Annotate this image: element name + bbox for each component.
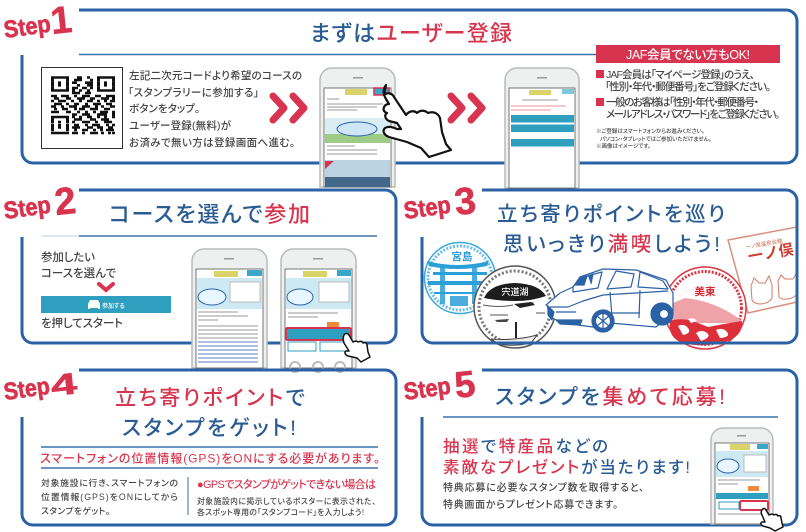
step 4 heading: スタンプをゲット! — [122, 417, 296, 440]
fine print: ※ご登録はスマートフォンからお進みください。 — [596, 127, 704, 135]
step 1 heading: まずはユーザー登録 — [310, 21, 512, 46]
stamp: Mito — [664, 267, 746, 349]
step 3 heading: 立ち寄りポイントを巡り — [497, 203, 725, 226]
stamp: Miyajima: 宮島 — [452, 250, 473, 263]
step 3 badge: Step — [402, 192, 452, 225]
step 5 badge: Step — [402, 373, 452, 406]
registration notes: 一般のお客様は「性別・年代・郵便番号・ — [606, 96, 759, 108]
panel: step 5 — [402, 363, 797, 531]
instructions: コースを選んで — [41, 267, 116, 280]
stamp: Miyajima — [424, 242, 496, 314]
QR code — [42, 68, 122, 148]
step 3 badge — [402, 180, 478, 225]
QR instructions — [128, 69, 302, 149]
phone: top page — [320, 68, 395, 187]
callout: JAF non-members — [596, 45, 780, 150]
instructions — [41, 250, 171, 330]
QR instructions: 「スタンプラリーに参加する」 — [128, 86, 259, 99]
step 4 heading: 立ち寄りポイントで — [115, 387, 305, 410]
prize headline: 素敵なプレゼントが当たります! — [443, 457, 690, 477]
step 2 heading: コースを選んで参加 — [109, 202, 310, 227]
registration notes — [596, 68, 780, 120]
prize headline — [443, 437, 690, 477]
GPS fallback — [197, 477, 376, 517]
instructions: 参加したい — [41, 250, 95, 264]
step 2 badge: Step — [2, 192, 52, 225]
GPS steps: スタンプをゲット。 — [41, 505, 110, 516]
prize detail: 特典応募に必要なスタンプ数を取得すると、 — [443, 481, 644, 494]
GPS steps: 対象施設に行き、スマートフォンの — [41, 477, 178, 488]
step 4 badge: Step — [2, 373, 51, 406]
step 5 heading: スタンプを集めて応募! — [495, 386, 725, 409]
step 4 heading — [115, 387, 305, 440]
step 2 badge — [2, 180, 78, 225]
GPS requirement: スマートフォンの位置情報(GPS)をONにする必要があります。 — [40, 450, 380, 466]
prize headline: 抽選で特産品などの — [443, 437, 608, 456]
instructions: 参加する — [102, 302, 125, 310]
phone: present page — [711, 428, 773, 524]
panel: step 4 — [2, 367, 396, 525]
stamp: Ichinomata onsen: 一ノ俣 — [747, 241, 795, 266]
QR instructions: お済みで無い方は登録画面へ進む。 — [129, 136, 295, 149]
stamp: Ichinomata onsen: 一ノ俣温泉会館 — [745, 237, 784, 251]
registration notes: JAF会員は「マイページ登録」のうえ、 — [606, 68, 755, 81]
panel: step 3 — [402, 180, 797, 349]
GPS fallback: 対象施設内に掲示しているポスターに表示された、 — [197, 496, 376, 506]
QR instructions: ユーザー登録(無料)が — [129, 119, 232, 132]
icon: tapping hand — [343, 334, 370, 362]
GPS fallback: 各スポット専用の「スタンプコード」を入力しよう! — [197, 507, 364, 517]
stamp: Mito: 美東 — [694, 285, 716, 298]
panel: step 1 — [2, 0, 797, 188]
QR instructions: 左記二次元コードより希望のコースの — [129, 69, 302, 82]
phone: course page — [192, 249, 267, 368]
step 3 badge: 3 — [453, 180, 478, 224]
step 4 badge — [2, 367, 79, 406]
registration notes: メールアドレス・パスワード」をご登録ください。 — [606, 108, 780, 120]
arrow: second chevrons — [451, 96, 482, 120]
step 1 badge: 1 — [49, 0, 74, 43]
step 1 badge — [2, 0, 74, 44]
border — [422, 190, 797, 343]
icon: tapping hand — [384, 85, 451, 157]
step 5 badge: 5 — [453, 363, 477, 406]
GPS fallback: ●GPSでスタンプがゲットできない場合は — [197, 477, 376, 491]
GPS steps — [41, 477, 178, 516]
QR instructions: ボタンをタップ。 — [129, 103, 200, 115]
callout: JAF non-members: JAF会員でない方もOK! — [626, 47, 750, 62]
step 4 badge: 4 — [49, 367, 79, 403]
illustration: car — [546, 269, 673, 332]
fine print: パソコン・タブレットではご参加いただけません。 — [600, 135, 712, 143]
step 5 badge — [402, 363, 477, 406]
prize detail: 特典画面からプレゼント応募できます。 — [443, 498, 618, 511]
step 3 heading: 思いっきり満喫しよう! — [503, 233, 720, 256]
phone: registration page — [505, 68, 579, 188]
stamp: Shinji lake — [474, 266, 556, 348]
icon: tapping hand — [761, 508, 783, 531]
stamp: Shinji lake: 宍道湖 — [501, 286, 529, 297]
stamp: Ichinomata onsen — [728, 227, 797, 313]
phone: join button page — [281, 249, 356, 372]
panel: step 2 — [2, 180, 396, 372]
fine print: ※画像はイメージです。 — [596, 142, 651, 150]
registration notes: 「性別・年代・郵便番号」をご登録ください。 — [605, 80, 771, 93]
fine print — [596, 127, 712, 150]
step 3 heading — [497, 203, 725, 256]
arrow: first chevrons — [273, 96, 304, 120]
prize detail — [443, 481, 644, 511]
step 1 badge: Step — [2, 11, 52, 44]
step 2 badge: 2 — [53, 180, 78, 224]
instructions: を押してスタート — [41, 316, 123, 330]
GPS steps: 位置情報(GPS)をONにしてから — [41, 491, 178, 502]
